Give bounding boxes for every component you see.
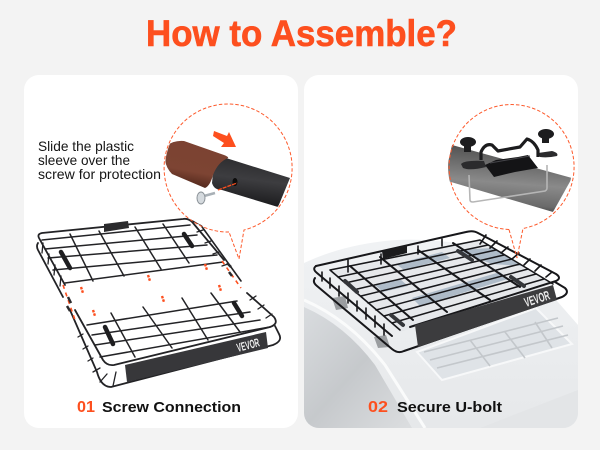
clamp flanges [461,161,486,169]
front plate [415,285,557,347]
wind handle [382,245,407,259]
VEVOR logo: VEVOR [235,335,261,355]
gray tube [444,145,572,212]
car roof illustration [304,240,578,428]
VEVOR logo: VEVOR [522,287,552,310]
roof under rack [330,240,553,332]
orange dashed alignment lines [63,261,241,320]
panel: screw connection [24,75,298,428]
screw hole [232,178,238,186]
callout outline [164,104,292,259]
back half frames [38,219,224,285]
front half frames [75,293,276,365]
hex key [469,165,547,202]
caption 01: Screw Connection [102,399,241,416]
roof rack installed [314,231,567,352]
roof rack: separated halves [37,219,280,387]
side window [304,307,412,428]
callout outline [449,105,574,258]
callout circle: sleeve detail [165,131,290,226]
back wind handle [104,221,129,232]
installed clamps [345,251,524,325]
caption 01: 01 [77,399,95,416]
brown plastic sleeve [165,141,228,188]
rear window wedge [480,390,578,428]
rack reflection [424,318,568,368]
callout circle: clamp detail [448,129,571,212]
mounting brackets [61,234,242,344]
instruction text [38,138,161,182]
clamp block [485,155,538,177]
panel: secure u-bolt [304,75,578,428]
orange assembly arrows [81,264,221,316]
screw [197,192,215,204]
knobs [460,129,554,152]
black tube [212,158,290,207]
instruction text: Slide the plastic [38,138,134,154]
connector pieces [67,263,232,311]
instruction text: screw for protection [38,166,161,182]
u strap [481,139,538,160]
instruction text: sleeve over the [38,152,130,168]
sunroof [417,308,572,380]
title: How to Assemble? [146,13,457,54]
front plate [125,332,268,382]
caption 02: Secure U-bolt [397,399,502,416]
orange guide line [218,183,237,190]
arrow [213,131,236,147]
roof feet [332,296,348,310]
caption 02: 02 [368,399,388,416]
